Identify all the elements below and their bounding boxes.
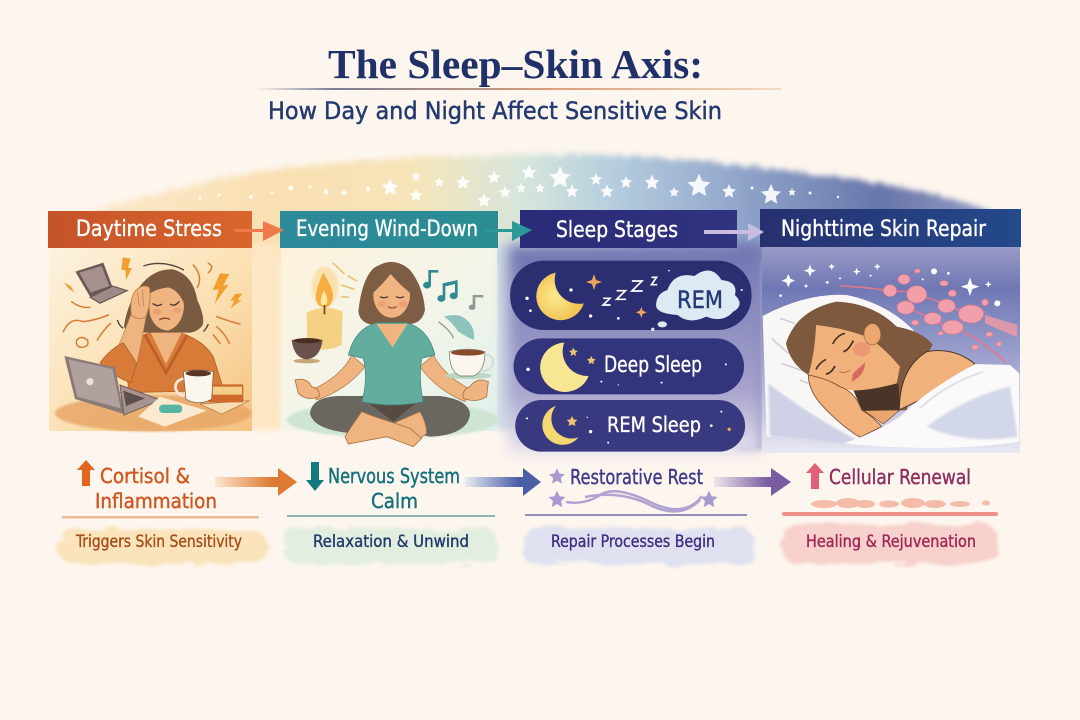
- rule: orange: [62, 516, 259, 518]
- hair: [124, 269, 203, 333]
- rule: teal: [287, 515, 495, 517]
- icon: up arrow: [77, 460, 95, 486]
- header: daytime stress: Daytime Stress: [76, 217, 222, 242]
- caption wash: pink: [782, 524, 998, 564]
- crossed feet: [393, 412, 427, 438]
- caption: healing and rejuvenation: Healing & Rejuvenation: [806, 532, 976, 551]
- REM cloud label: REM: [677, 286, 723, 314]
- title: The Sleep–Skin Axis:: [328, 41, 703, 87]
- outcome arrow: blue: [465, 468, 541, 496]
- pill: deep sleep: [514, 338, 744, 394]
- sky band with stars: [90, 154, 992, 262]
- hair: [786, 302, 933, 413]
- REM sleep label: REM Sleep: [607, 413, 701, 437]
- bowl: [293, 359, 320, 363]
- outcome: cellular renewal: Cellular Renewal: [829, 465, 971, 489]
- caption wash: lavender: [522, 528, 754, 564]
- arrow: stress to wind-down: [234, 221, 284, 241]
- header: evening wind-down: Evening Wind-Down: [296, 217, 478, 242]
- pill: REM dream: [510, 261, 752, 331]
- stress squiggles: [63, 263, 240, 347]
- outcome: cortisol and inflammation: Inflammation: [95, 489, 217, 513]
- panel 4 illustration: [763, 263, 1019, 448]
- rule: pink: [782, 512, 998, 516]
- outcome: nervous system calm: Calm: [371, 489, 418, 513]
- header: sleep stages: Sleep Stages: [556, 218, 678, 243]
- arms: [310, 355, 472, 402]
- caption: repair processes begin: Repair Processes Begin: [551, 532, 715, 551]
- candle: [312, 267, 338, 307]
- outcome: cortisol and inflammation: [77, 460, 217, 513]
- icon: star ribbon: [548, 490, 718, 511]
- icon: down arrow: [306, 462, 324, 491]
- outcome arrow: orange: [215, 468, 297, 496]
- header: evening wind-down: [280, 211, 498, 248]
- music notes: [423, 270, 458, 302]
- icon: star: [549, 468, 565, 484]
- book stack: [208, 384, 243, 402]
- backdrop tints between panels: [250, 245, 763, 450]
- arm and hand at head: [114, 315, 146, 372]
- outcome: cellular renewal: [806, 463, 990, 508]
- subtitle: How Day and Night Affect Sensitive Skin: [268, 97, 722, 125]
- blanket: [843, 364, 1019, 448]
- header: sleep stages: [520, 210, 737, 248]
- hand: [808, 375, 882, 437]
- outcome: cortisol and inflammation: Cortisol &: [100, 464, 190, 488]
- steam wisp: [444, 315, 474, 340]
- rule: purple: [525, 514, 747, 516]
- pill: REM sleep: [515, 400, 745, 452]
- panel: daytime stress: [49, 248, 252, 432]
- panel: nighttime skin repair: [762, 247, 1020, 453]
- sweater: [120, 333, 224, 393]
- laptop front: [64, 356, 124, 414]
- caption: triggers skin sensitivity: Triggers Skin Sensitivity: [75, 532, 242, 551]
- face: [148, 287, 184, 331]
- caption wash: green: [284, 528, 498, 564]
- face: [808, 325, 900, 391]
- teacup: [445, 372, 492, 379]
- sparkles: [779, 263, 1000, 306]
- shoulder: [899, 351, 975, 410]
- header: nighttime skin repair: [760, 209, 1021, 247]
- outcome: nervous system calm: Nervous System: [328, 464, 460, 488]
- deep sleep label: Deep Sleep: [604, 353, 702, 378]
- icon: up arrow: [806, 463, 824, 489]
- icon: skin cell row: [811, 498, 990, 508]
- thought cloud: [656, 271, 740, 320]
- pillow: [763, 295, 920, 444]
- legs: [310, 396, 470, 437]
- outcome: nervous system calm: [306, 462, 460, 513]
- mug: [183, 370, 213, 403]
- lightning bolts: [64, 257, 242, 309]
- title divider: [255, 88, 781, 90]
- outcome arrow: purple: [714, 468, 791, 496]
- caption wash: orange: [58, 530, 268, 564]
- panel: evening wind-down: [281, 248, 500, 447]
- face: [373, 272, 410, 318]
- outcome: restorative rest: [548, 465, 718, 511]
- header: nighttime skin repair: Nighttime Skin Repair: [781, 217, 987, 242]
- panel: sleep stages backdrop: [508, 245, 762, 455]
- small laptop: [75, 263, 113, 297]
- arrow: sleep to repair: [704, 223, 764, 241]
- papers and eraser: [138, 397, 207, 427]
- skin cell strands: [985, 315, 1017, 337]
- arrow: wind-down to sleep: [486, 221, 532, 241]
- caption: relaxation and unwind: Relaxation & Unwind: [313, 532, 469, 551]
- outcome: restorative rest: Restorative Rest: [570, 465, 703, 489]
- header: daytime stress: [48, 211, 252, 248]
- hair: [358, 262, 425, 325]
- panel 2 illustration: [287, 262, 500, 447]
- shirt: [348, 323, 435, 405]
- panel 1 illustration: [55, 257, 252, 432]
- calm rays: [333, 263, 357, 297]
